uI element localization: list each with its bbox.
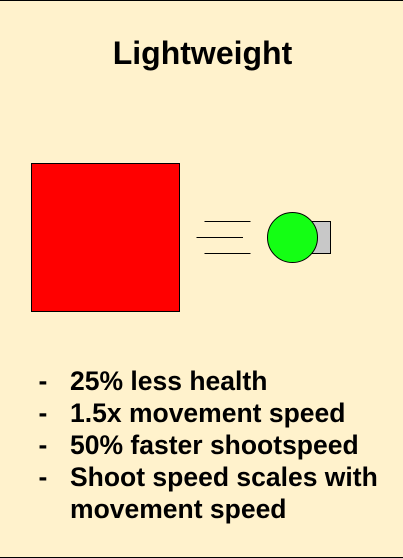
- list item: scaling: [38, 462, 378, 524]
- feature list: [38, 366, 378, 524]
- icon: speed lines: [196, 222, 250, 254]
- list item: movement speed: 1.5x movement speed: [70, 398, 345, 428]
- icon: red square: [32, 164, 180, 312]
- list item: scaling: -: [38, 462, 47, 492]
- list item: movement speed: -: [38, 398, 47, 428]
- player body: [268, 212, 318, 262]
- list item: shoot speed: -: [38, 430, 47, 460]
- list item: scaling: movement speed: [70, 494, 286, 524]
- list item: health: 25% less health: [70, 366, 267, 396]
- list item: scaling: Shoot speed scales with: [70, 462, 378, 492]
- title: Lightweight: [113, 35, 293, 71]
- list item: health: -: [38, 366, 47, 396]
- icon: player with gun: [268, 212, 330, 262]
- list item: shoot speed: 50% faster shootspeed: [70, 430, 359, 460]
- gun barrel: [308, 222, 330, 254]
